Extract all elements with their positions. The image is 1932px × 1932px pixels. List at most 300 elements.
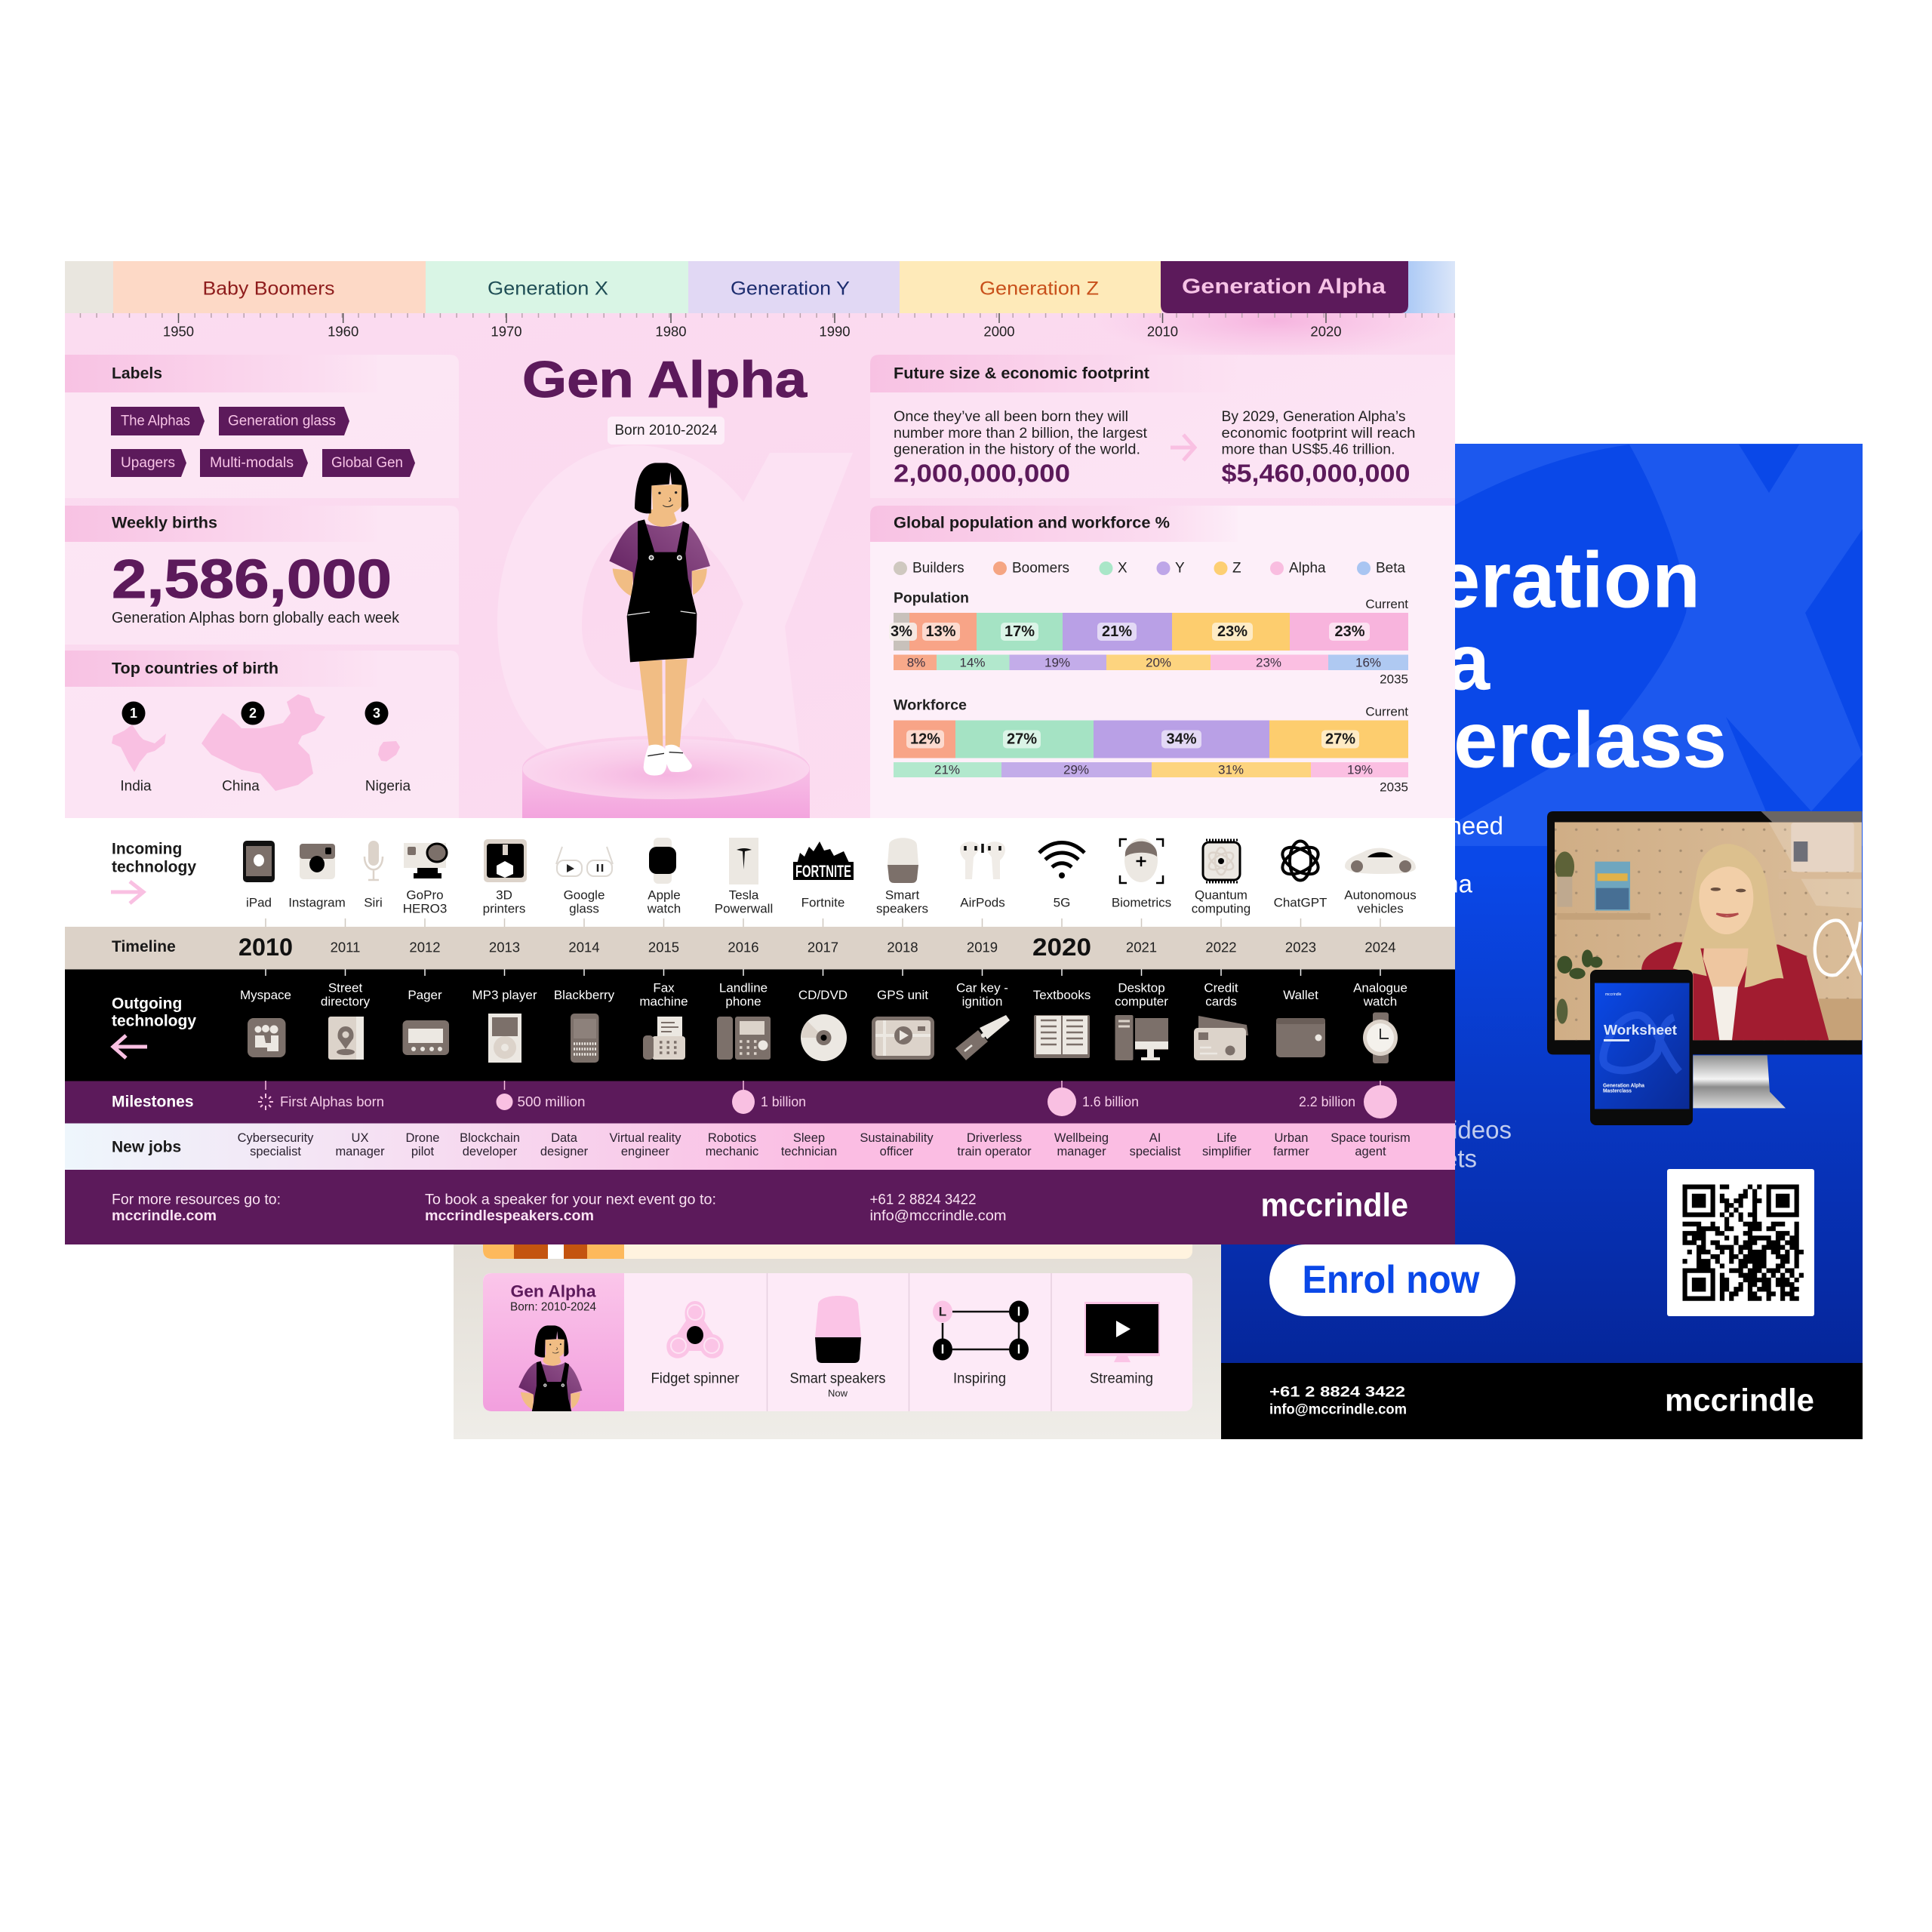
copy: generation in the history of the world.: [894, 441, 1140, 457]
copy: By 2029, Generation Alpha’s: [1221, 408, 1406, 425]
icon: inspiring network: l: [1017, 1342, 1020, 1357]
footer logo: mccrindle: [1260, 1186, 1408, 1224]
heading: Timeline: [112, 938, 176, 955]
country labels: India: [120, 779, 152, 794]
icon: inspiring network: l: [941, 1342, 944, 1357]
outgoing labels: Pager: [408, 988, 442, 1002]
decade labels: 1950: [163, 323, 194, 340]
incoming labels: [246, 888, 1417, 916]
panel: footer: [65, 1170, 1455, 1244]
masterclass heading: [1269, 536, 1727, 785]
tag: Global Gen: [331, 455, 403, 471]
copy: [1221, 408, 1416, 457]
neon alpha: [1815, 920, 1863, 975]
icon: landline phone: [717, 1017, 771, 1060]
decade labels: 2010: [1147, 323, 1178, 340]
rank badges: 2: [249, 706, 257, 721]
tag: [322, 449, 415, 477]
caption: Generation Alphas born globally each week: [112, 610, 400, 626]
enrol button: Enrol now: [1303, 1258, 1480, 1302]
job titles: pilot: [411, 1145, 435, 1158]
rank badges: 1: [130, 706, 137, 721]
outgoing labels: Car key -: [956, 981, 1008, 995]
masterclass heading: Generation: [1282, 536, 1700, 625]
footer contact: +61 2 8824 3422: [869, 1192, 977, 1208]
panel: future size: [870, 355, 1455, 498]
number: $5,460,000,000: [1221, 459, 1410, 488]
tablet: mccrindle: [1605, 992, 1622, 997]
outgoing labels: Street: [328, 981, 362, 995]
chart: population: 23%: [1256, 655, 1281, 670]
years: 2011: [331, 939, 360, 955]
chart: workforce: 31%: [1218, 762, 1244, 777]
outgoing labels: MP3 player: [472, 988, 537, 1002]
chart: workforce: Workforce: [894, 697, 967, 714]
icon: GPS unit: [872, 1017, 934, 1060]
legend: [894, 560, 1406, 577]
job titles: mechanic: [706, 1145, 758, 1158]
chart: population: 19%: [1044, 655, 1070, 670]
tag: The Alphas: [121, 414, 190, 429]
panel: generation tabs: [65, 261, 1455, 313]
years: 2022: [1205, 939, 1237, 955]
outgoing labels: Wallet: [1283, 988, 1318, 1002]
panel: labels: [65, 355, 459, 498]
footer contact: info@mccrindle.com: [869, 1208, 1007, 1224]
chart: workforce: 27%: [1325, 731, 1355, 747]
milestone: 2.2 billion: [1299, 1085, 1397, 1118]
tag: Generation glass: [228, 414, 336, 429]
card labels: Now: [828, 1387, 848, 1399]
chart: population: Population: [894, 590, 969, 607]
title: Gen Alpha: [522, 351, 808, 408]
top card strip: [483, 1230, 1192, 1259]
outgoing labels: Myspace: [240, 988, 291, 1002]
icon: textbooks: [1034, 1015, 1090, 1058]
job titles: Cybersecurity: [238, 1131, 314, 1145]
job titles: Drone: [406, 1131, 439, 1145]
card subheading: Born: 2010-2024: [510, 1301, 596, 1313]
chart: workforce: 19%: [1347, 762, 1373, 777]
card labels: Fidget spinner: [651, 1371, 740, 1387]
incoming labels: 3D: [496, 888, 512, 903]
masterclass copy: to understand Gen Alpha: [1197, 869, 1473, 898]
job titles: engineer: [621, 1145, 670, 1158]
footer speakers: mccrindlespeakers.com: [425, 1208, 594, 1224]
tag: [111, 449, 186, 477]
icon: Myspace: [248, 1018, 285, 1057]
decade labels: 1960: [328, 323, 358, 340]
job titles: simplifier: [1202, 1145, 1252, 1158]
heading: technology: [112, 859, 196, 875]
job titles: Sleep: [793, 1131, 825, 1145]
job titles: officer: [880, 1145, 914, 1158]
chart: population: 23%: [1334, 623, 1365, 640]
job titles: Blockchain: [460, 1131, 520, 1145]
chart: population: 23%: [1217, 623, 1247, 640]
panel: generation tabs: Generation X: [488, 278, 608, 299]
panel: outgoing technology: [65, 969, 1455, 1081]
panel: hidden back card: [454, 1244, 1221, 1439]
masterclass copy: Everything you need: [1276, 812, 1503, 839]
job titles: manager: [335, 1145, 385, 1158]
tag: [219, 407, 349, 435]
tablet: Worksheet: [1604, 1023, 1677, 1038]
years: 2023: [1285, 939, 1316, 955]
job titles: Sustainability: [860, 1131, 934, 1145]
outgoing labels: watch: [1363, 995, 1397, 1008]
monitor: [1547, 811, 1863, 1108]
country labels: [120, 779, 411, 794]
heading: New jobs: [112, 1138, 181, 1156]
years: 2013: [489, 939, 520, 955]
chart: workforce: 34%: [1166, 731, 1197, 747]
icon: inspiring network: l: [1017, 1304, 1020, 1319]
icon: AirPods: [960, 841, 1005, 879]
panel: generation tabs: Generation Alpha: [1182, 275, 1386, 297]
panel: main infographic: [65, 261, 1455, 1244]
icon: pager: [403, 1020, 449, 1055]
incoming labels: speakers: [876, 901, 928, 916]
heading: technology: [112, 1013, 196, 1029]
icon: street directory: [328, 1017, 364, 1060]
icon: streaming screen: [1084, 1302, 1160, 1362]
milestone: 1 billion: 1 billion: [761, 1094, 806, 1109]
heading: [112, 995, 196, 1029]
tag: Multi-modals: [210, 455, 294, 471]
chart: population: 21%: [1102, 623, 1132, 640]
incoming labels: watch: [647, 901, 681, 916]
milestone: 500 million: 500 million: [518, 1094, 586, 1109]
legend: Boomers: [1012, 560, 1069, 577]
panel: incoming technology: [65, 818, 1455, 927]
heading: Milestones: [112, 1093, 194, 1111]
chart: population: [889, 590, 1408, 687]
copy: more than US$5.46 trillion.: [1221, 441, 1395, 457]
outgoing labels: computer: [1115, 995, 1168, 1008]
decade labels: 1990: [819, 323, 851, 340]
incoming labels: Smart: [885, 888, 919, 903]
born pill: Born 2010-2024: [614, 423, 718, 438]
chart: population: 13%: [925, 623, 956, 640]
legend: Y: [1175, 560, 1185, 577]
job titles: developer: [463, 1145, 518, 1158]
decade labels: 2000: [983, 323, 1015, 340]
arrow: [113, 1035, 147, 1058]
outgoing labels: directory: [321, 995, 371, 1008]
job titles: AI: [1149, 1131, 1161, 1145]
decade labels: [163, 323, 1342, 340]
job titles: Space tourism: [1331, 1131, 1411, 1145]
alpha watermark: [497, 445, 853, 771]
heading: Outgoing: [112, 995, 182, 1013]
heading: [112, 841, 196, 875]
map: India: [112, 724, 166, 772]
chart: population: 17%: [1004, 623, 1035, 640]
icon: car key: [955, 1015, 1010, 1060]
incoming labels: HERO3: [403, 901, 447, 916]
years: 2021: [1126, 939, 1157, 955]
incoming labels: Biometrics: [1112, 895, 1171, 910]
heading: Global population and workforce %: [894, 515, 1170, 531]
job titles: train operator: [957, 1145, 1032, 1158]
job titles: Virtual reality: [609, 1131, 681, 1145]
incoming labels: ChatGPT: [1274, 895, 1327, 910]
chart: workforce: 27%: [1007, 731, 1037, 747]
copy: number more than 2 billion, the largest: [894, 425, 1148, 441]
panel: global population and workforce: [870, 506, 1455, 818]
podium: [522, 736, 810, 818]
number: 2,000,000,000: [894, 459, 1070, 488]
incoming labels: Autonomous: [1344, 888, 1417, 903]
presenter: [1641, 844, 1829, 1040]
country labels: China: [222, 779, 260, 794]
masterclass copy: Six training videos: [1309, 1115, 1512, 1144]
outgoing labels: Analogue: [1353, 981, 1407, 995]
incoming labels: GoPro: [406, 888, 444, 903]
outgoing labels: ignition: [962, 995, 1002, 1008]
icon: quantum chip: [1203, 840, 1240, 882]
heading: Incoming: [112, 841, 182, 857]
copy: economic footprint will reach: [1221, 425, 1416, 441]
icon: wallet: [1276, 1018, 1325, 1057]
chart: workforce: [894, 697, 1408, 794]
arrow: [1171, 435, 1195, 460]
icon: biometrics: [1120, 838, 1163, 883]
job titles: specialist: [250, 1145, 301, 1158]
milestone: 1 billion: [732, 1090, 806, 1114]
incoming labels: Quantum: [1195, 888, 1247, 903]
card labels: [651, 1371, 1153, 1399]
job titles: technician: [781, 1145, 837, 1158]
years: 2014: [568, 939, 600, 955]
incoming labels: Powerwall: [715, 901, 773, 916]
outgoing labels: machine: [639, 995, 688, 1008]
icon: MP3 player: [488, 1014, 521, 1063]
decade labels: 1980: [655, 323, 687, 340]
footer resources: mccrindle.com: [112, 1208, 217, 1224]
chart: workforce: 29%: [1063, 762, 1089, 777]
panel: masterclass advert: [1197, 444, 1863, 1439]
chart: population: 2035: [1380, 672, 1408, 687]
years: 2016: [728, 939, 759, 955]
job titles: Urban: [1275, 1131, 1308, 1145]
years: 2018: [887, 939, 918, 955]
heading: Top countries of birth: [112, 660, 278, 678]
panel: new jobs: [65, 1123, 1455, 1170]
tablet: Masterclass: [1603, 1088, 1632, 1094]
masterclass copy: and worksheets: [1303, 1144, 1477, 1173]
job titles: manager: [1057, 1145, 1106, 1158]
icon: 5G wifi: [1039, 842, 1084, 878]
chart: population: 8%: [907, 655, 925, 670]
milestone: 500 million: [497, 1094, 586, 1110]
incoming labels: vehicles: [1357, 901, 1404, 916]
icon: GoPro: [404, 843, 447, 878]
icon: Google glass: [556, 847, 613, 876]
job titles: specialist: [1130, 1145, 1181, 1158]
outgoing labels: [240, 981, 1407, 1008]
job titles: agent: [1355, 1145, 1386, 1158]
job titles: UX: [352, 1131, 368, 1145]
years: 2024: [1364, 939, 1396, 955]
icon: ChatGPT knot: [1278, 841, 1323, 880]
copy: [894, 408, 1148, 457]
born pill: [608, 417, 724, 445]
incoming labels: AirPods: [960, 895, 1005, 910]
incoming labels: Siri: [364, 895, 383, 910]
chart: population: Current: [1365, 597, 1408, 611]
incoming labels: 5G: [1054, 895, 1070, 910]
legend: Z: [1232, 560, 1241, 577]
arrow: [111, 881, 143, 903]
stand: [1693, 1055, 1786, 1108]
legend: Alpha: [1289, 560, 1326, 577]
chart: workforce: 12%: [910, 731, 940, 747]
icon: iPad: [243, 841, 275, 882]
tag: [111, 407, 205, 435]
rank badges: 3: [373, 706, 380, 721]
years: 2010: [238, 934, 293, 961]
milestone: 2.2 billion: 2.2 billion: [1299, 1094, 1355, 1109]
heading: Labels: [112, 365, 162, 382]
icon: Apple watch: [649, 838, 676, 884]
map: China: [202, 694, 325, 791]
years: 2015: [648, 939, 679, 955]
incoming labels: Tesla: [729, 888, 759, 903]
enrol button: [1269, 1244, 1515, 1316]
outgoing labels: Blackberry: [554, 988, 615, 1002]
card labels: Smart speakers: [789, 1371, 886, 1387]
milestone: 1.6 billion: 1.6 billion: [1082, 1094, 1139, 1109]
icon: desktop computer: [1115, 1015, 1168, 1060]
panel: weekly births: [65, 506, 459, 645]
incoming labels: Google: [564, 888, 605, 903]
job titles: Life: [1217, 1131, 1237, 1145]
footer resources: [112, 1192, 281, 1224]
outgoing labels: Credit: [1204, 981, 1238, 995]
masterclass heading: Alpha: [1269, 619, 1491, 706]
years: 2017: [808, 939, 838, 955]
QR code: [1667, 1169, 1814, 1316]
panel: top countries: [65, 651, 459, 818]
chart: population: 16%: [1355, 655, 1381, 670]
masterclass heading: Masterclass: [1273, 696, 1727, 785]
incoming labels: printers: [483, 901, 525, 916]
outgoing labels: Desktop: [1118, 981, 1165, 995]
outgoing labels: cards: [1205, 995, 1237, 1008]
outgoing labels: CD/DVD: [798, 988, 848, 1002]
masterclass footer: mccrindle: [1665, 1383, 1814, 1417]
tablet: [1590, 970, 1693, 1125]
rank badges: [122, 702, 388, 724]
masterclass footer: +61 2 8824 3422: [1269, 1384, 1405, 1401]
tag: [200, 449, 308, 477]
incoming labels: Apple: [648, 888, 681, 903]
chart: population: 14%: [959, 655, 986, 670]
heading: Weekly births: [112, 515, 217, 531]
big number: 2,586,000: [112, 549, 392, 610]
outgoing labels: phone: [725, 995, 761, 1008]
masterclass copy: [1197, 812, 1512, 1173]
icon: inspiring network: L: [939, 1304, 946, 1319]
decade labels: 2020: [1310, 323, 1342, 340]
years: 2012: [409, 939, 441, 955]
legend: X: [1118, 560, 1128, 577]
card labels: Streaming: [1090, 1371, 1153, 1387]
copy: Once they’ve all been born they will: [894, 408, 1128, 425]
chart: population: 20%: [1146, 655, 1171, 670]
icon: inspiring network: [933, 1301, 1029, 1360]
years: 2020: [1032, 934, 1091, 961]
icon: Instagram: [300, 844, 335, 879]
icon: CD: [801, 1014, 847, 1061]
panel: generation tabs: Generation Z: [980, 278, 1099, 299]
chart: workforce: 2035: [1380, 780, 1408, 794]
outgoing labels: Landline: [719, 981, 768, 995]
incoming labels: computing: [1192, 901, 1251, 916]
tag: Upagers: [121, 455, 175, 471]
incoming labels: iPad: [246, 895, 272, 910]
job titles: designer: [540, 1145, 589, 1158]
country labels: Nigeria: [365, 779, 411, 794]
job titles: Wellbeing: [1054, 1131, 1109, 1145]
card: Gen Alpha icons row: [483, 1273, 1192, 1411]
icon: smart speaker: [888, 838, 918, 883]
footer resources: For more resources go to:: [112, 1192, 281, 1208]
job titles: [238, 1131, 1411, 1158]
icon: Tesla powerwall: [729, 838, 758, 884]
years: 2019: [967, 939, 998, 955]
tablet: Generation Alpha: [1603, 1084, 1644, 1088]
heading: Future size & economic footprint: [894, 365, 1149, 382]
icon: Siri mic: [365, 841, 383, 880]
icon: autonomous car: [1345, 848, 1416, 874]
job titles: Robotics: [708, 1131, 756, 1145]
incoming labels: glass: [569, 901, 599, 916]
map: Nigeria: [378, 741, 400, 761]
icon: credit cards: [1194, 1016, 1248, 1060]
footer speakers: [425, 1192, 716, 1224]
icon: mini girl: [518, 1325, 583, 1411]
outgoing labels: Fax: [653, 981, 675, 995]
footer speakers: To book a speaker for your next event go to:: [425, 1192, 716, 1208]
icon: Fortnite logo: FORTNITE: [795, 862, 851, 881]
icon: Fortnite logo: [793, 841, 854, 881]
chart: workforce: Current: [1365, 705, 1408, 718]
chart: population: 3%: [891, 623, 912, 640]
icon: 3D printer: [484, 839, 527, 882]
icon: smart speaker: [815, 1296, 861, 1363]
milestone: 1.6 billion: [1048, 1088, 1139, 1116]
incoming labels: Fortnite: [801, 895, 844, 910]
character: girl: [609, 463, 710, 776]
card heading: Gen Alpha: [510, 1281, 596, 1301]
panel: generation tabs: Generation Y: [731, 278, 850, 299]
panel: generation tabs: Baby Boomers: [202, 278, 335, 299]
outgoing labels: Textbooks: [1033, 988, 1091, 1002]
decade labels: 1970: [491, 323, 522, 340]
job titles: Driverless: [967, 1131, 1022, 1145]
panel: timeline: [65, 927, 1455, 969]
footer contact: [869, 1192, 1007, 1224]
masterclass footer: [1221, 1363, 1863, 1439]
icon: Blackberry: [571, 1014, 599, 1063]
card labels: Inspiring: [953, 1371, 1006, 1387]
job titles: Data: [551, 1131, 578, 1145]
chart: workforce: 21%: [934, 762, 960, 777]
milestone: first Alphas born: First Alphas born: [280, 1094, 384, 1109]
